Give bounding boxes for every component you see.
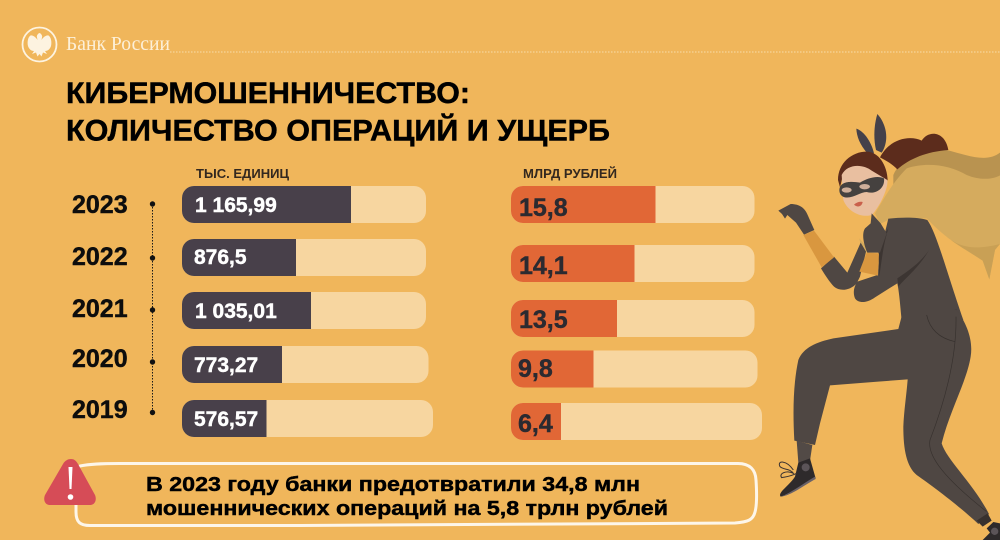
figure upper body bbox=[778, 114, 1000, 320]
bar 15,8: 15,8 bbox=[519, 194, 568, 222]
icon: eagle emblem bbox=[22, 28, 56, 62]
mask bbox=[839, 177, 884, 198]
rear foot bbox=[983, 522, 1000, 540]
right chart heading: МЛРД РУБЛЕЙ bbox=[523, 166, 617, 181]
sack bbox=[859, 150, 1000, 279]
title: КОЛИЧЕСТВО ОПЕРАЦИЙ И УЩЕРБ bbox=[66, 114, 610, 148]
left chart: operations, thousand units bbox=[182, 166, 433, 437]
bar 13,5: 13,5 bbox=[519, 306, 568, 334]
sleeves bbox=[803, 231, 879, 276]
bow ears bbox=[856, 114, 886, 153]
illustration: masked thief with a sack bbox=[778, 114, 1000, 540]
bar 9,8 bbox=[511, 350, 758, 388]
face bbox=[842, 166, 887, 216]
callout bbox=[44, 459, 757, 526]
rear ankle bbox=[977, 513, 992, 527]
bar 14,1: 14,1 bbox=[519, 252, 568, 280]
torso bbox=[854, 218, 963, 320]
logo wordmark: Банк России bbox=[66, 34, 170, 55]
bar 2022: 876,5 bbox=[194, 246, 247, 269]
callout text bbox=[146, 473, 668, 520]
bar 2023 bbox=[182, 186, 426, 223]
bar 9,8: 9,8 bbox=[518, 355, 553, 383]
timeline of years: 2019 bbox=[72, 396, 128, 424]
bar 6,4 bbox=[511, 403, 762, 440]
bar 2020 bbox=[182, 346, 428, 383]
head hair bbox=[838, 152, 888, 187]
gloves bbox=[778, 204, 887, 253]
left chart heading: ТЫС. ЕДИНИЦ bbox=[196, 166, 289, 181]
bar 14,1 bbox=[511, 245, 754, 282]
ankle bbox=[797, 441, 812, 463]
right chart: damage, billion rubles bbox=[511, 166, 762, 440]
icon: warning triangle bbox=[44, 459, 96, 505]
timeline of years: 2022 bbox=[72, 243, 128, 271]
hair bun bbox=[880, 134, 948, 169]
shoe bbox=[780, 458, 816, 497]
bar 2022 bbox=[182, 239, 426, 276]
bar 6,4: 6,4 bbox=[518, 410, 553, 438]
bar 15,8 bbox=[511, 186, 754, 223]
timeline of years: 2023 bbox=[72, 191, 128, 219]
bar 2019 bbox=[182, 400, 433, 437]
timeline of years bbox=[72, 191, 155, 424]
callout text: мошеннических операций на 5,8 трлн рублей bbox=[146, 497, 668, 520]
bar 2021 bbox=[182, 292, 426, 329]
bar 2021: 1 035,01 bbox=[195, 300, 277, 323]
timeline of years: 2021 bbox=[72, 295, 128, 323]
title: КИБЕРМОШЕННИЧЕСТВО: bbox=[66, 77, 470, 110]
timeline of years: 2020 bbox=[72, 345, 128, 373]
callout text: В 2023 году банки предотвратили 34,8 млн bbox=[146, 473, 640, 496]
forward arm bbox=[821, 243, 866, 290]
title bbox=[66, 77, 610, 148]
header: Bank of Russia logo bbox=[22, 28, 1000, 62]
bar 13,5 bbox=[511, 300, 754, 337]
bar 2019: 576,57 bbox=[194, 408, 258, 431]
bar 2020: 773,27 bbox=[194, 354, 258, 377]
bar 2023: 1 165,99 bbox=[195, 194, 277, 217]
trousers bbox=[794, 310, 989, 524]
figure legs bbox=[779, 310, 1000, 540]
